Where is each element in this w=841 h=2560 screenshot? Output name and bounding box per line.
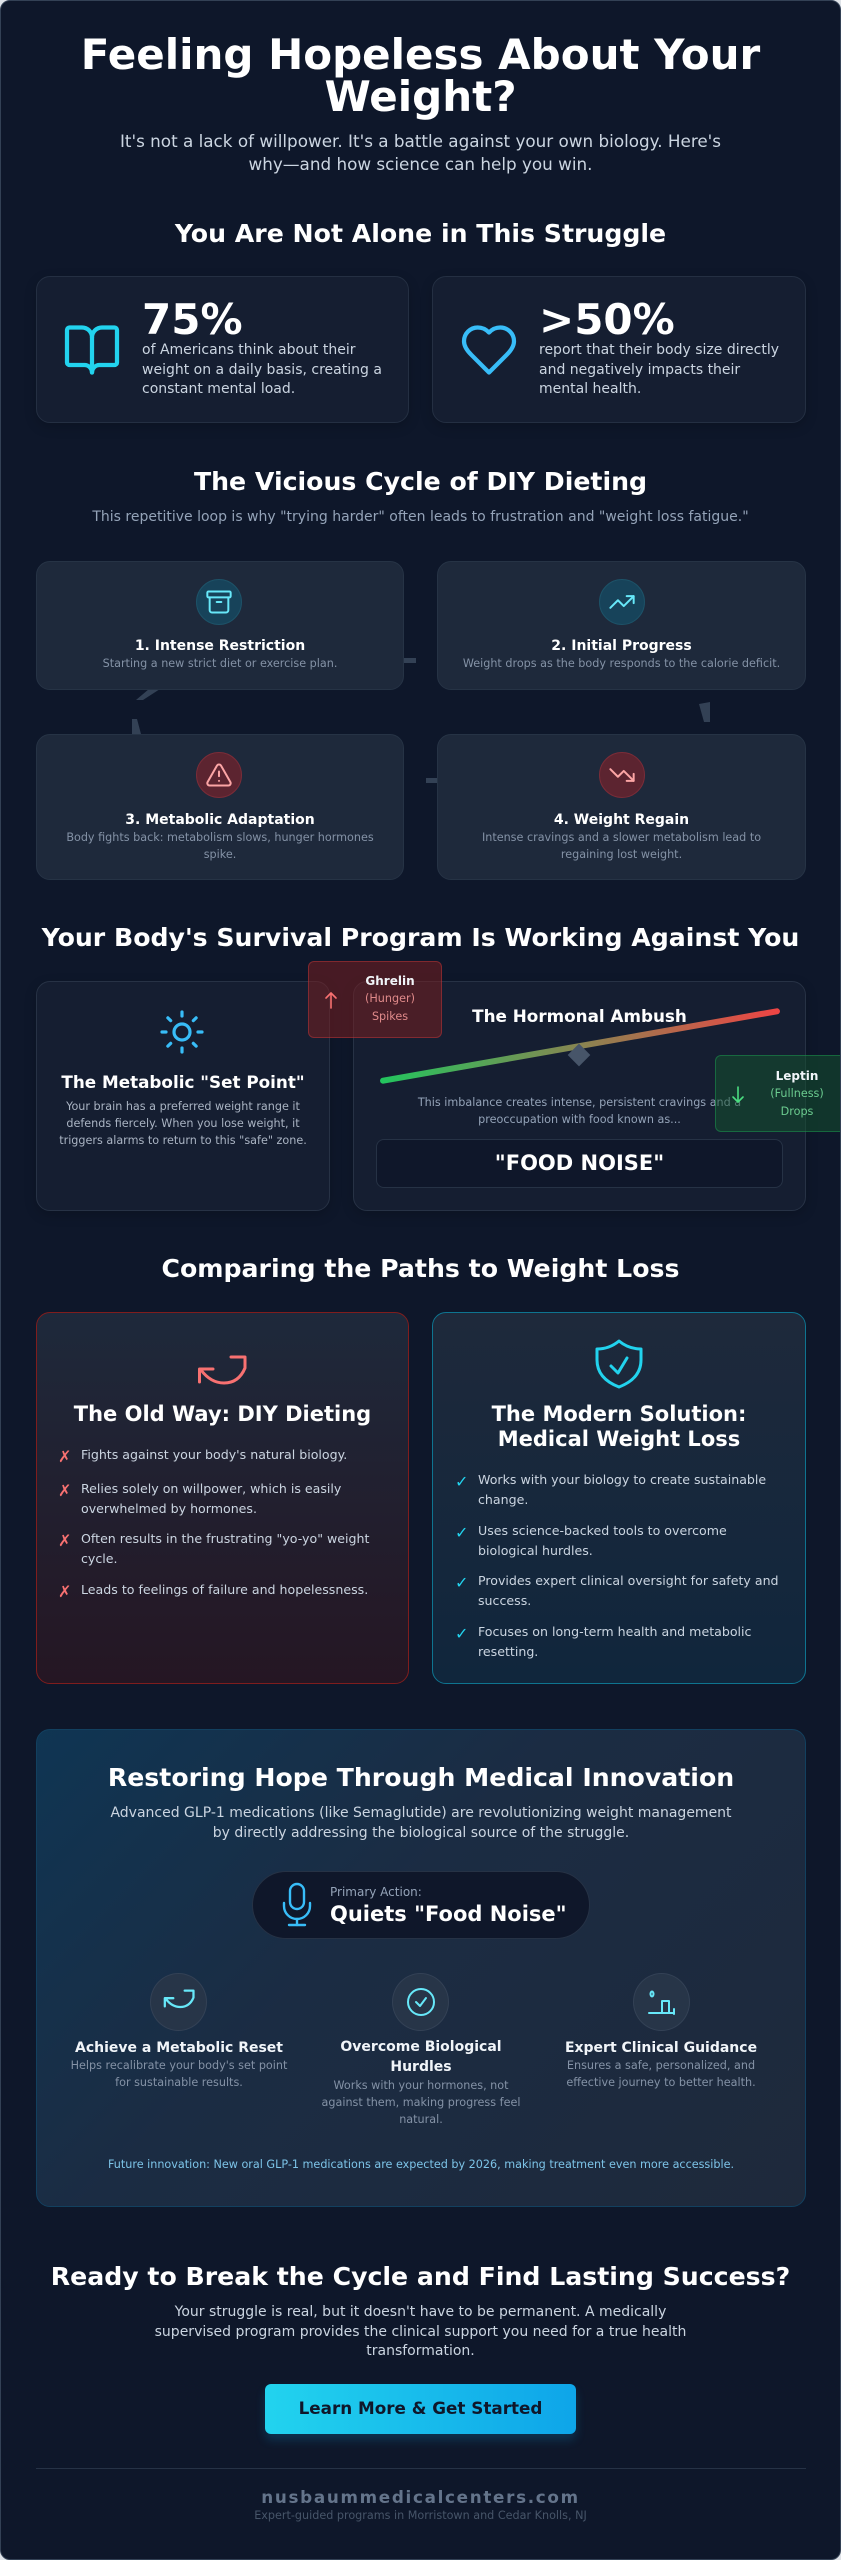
modern solution list xyxy=(455,1472,779,1659)
stat number: 75% xyxy=(142,295,243,344)
list item xyxy=(58,1481,341,1516)
leptin label: (Fullness) xyxy=(770,1087,824,1100)
step text xyxy=(482,831,761,861)
icon: return arrow xyxy=(198,1356,246,1384)
panel intro: Advanced GLP-1 medications (like Semaglutide) are revolutionizing weight management xyxy=(110,1805,732,1821)
step text: Weight drops as the body responds to the calorie deficit. xyxy=(463,657,780,670)
benefit text: effective journey to better health. xyxy=(566,2076,756,2089)
step text: Body fights back: metabolism slows, hunger hormones xyxy=(66,831,374,844)
list item: Fights against your body's natural biology. xyxy=(81,1447,347,1462)
panel: 75% stat xyxy=(36,276,409,423)
icon: open book xyxy=(64,325,120,375)
benefit title: Overcome Biological xyxy=(340,2039,502,2055)
callout: ghrelin xyxy=(308,961,442,1038)
set point title: The Metabolic "Set Point" xyxy=(61,1072,305,1092)
action label: Primary Action: xyxy=(330,1885,422,1899)
list item xyxy=(455,1573,779,1608)
stat text: report that their body size directly xyxy=(539,342,779,358)
stat text: weight on a daily basis, creating a xyxy=(142,362,382,378)
action text: Quiets "Food Noise" xyxy=(330,1902,567,1926)
footer domain: nusbaummedicalcenters.com xyxy=(261,2487,580,2507)
heading: not alone: You Are Not Alone in This Struggle xyxy=(175,219,666,248)
heading: call to action: Ready to Break the Cycle and Find Lasting Success? xyxy=(51,2262,790,2291)
old way list: ✗ xyxy=(58,1531,71,1550)
benefit title xyxy=(340,2039,502,2075)
callout: leptin xyxy=(715,1055,841,1132)
list item: Focuses on long-term health and metabolic xyxy=(478,1624,751,1639)
step title: 1. Intense Restriction xyxy=(135,638,305,654)
set point text: Your brain has a preferred weight range it xyxy=(66,1100,300,1113)
heading: vicious cycle: The Vicious Cycle of DIY Dieting xyxy=(194,467,647,496)
panel: 50% stat xyxy=(432,276,806,423)
ambush text: preoccupation with food known as... xyxy=(478,1113,681,1126)
icon: clinician xyxy=(633,1973,690,2031)
ambush text: This imbalance creates intense, persistent cravings and a xyxy=(418,1096,741,1109)
benefit: biological hurdles xyxy=(322,1973,520,2126)
icon: warning triangle xyxy=(196,752,242,798)
cta text: Your struggle is real, but it doesn't have to be permanent. A medically xyxy=(175,2304,666,2320)
list item: biological hurdles. xyxy=(478,1543,593,1558)
old way list: ✗ xyxy=(58,1447,71,1466)
stat text: mental health. xyxy=(539,381,641,397)
ambush title: The Hormonal Ambush xyxy=(472,1006,687,1026)
ambush text xyxy=(418,1096,741,1126)
food noise box xyxy=(376,1139,783,1188)
stat text: constant mental load. xyxy=(142,381,295,397)
modern solution list: ✓ xyxy=(455,1523,468,1542)
ghrelin label: Ghrelin xyxy=(365,974,415,988)
benefit text: natural. xyxy=(399,2113,443,2126)
footer divider xyxy=(36,2468,806,2469)
benefit text: Works with your hormones, not xyxy=(333,2079,509,2092)
section intro: This repetitive loop is why "trying harder" often leads to frustration and "weight loss fatigue." xyxy=(92,509,749,525)
benefit text: for sustainable results. xyxy=(115,2076,243,2089)
modern solution title: The Modern Solution: xyxy=(492,1402,746,1426)
modern solution list: ✓ xyxy=(455,1573,468,1592)
subtitle xyxy=(120,131,721,174)
stat text: and negatively impacts their xyxy=(539,362,740,378)
list item: Often results in the frustrating "yo-yo" weight xyxy=(81,1531,369,1546)
benefit text: Ensures a safe, personalized, and xyxy=(567,2059,755,2072)
step title: 4. Weight Regain xyxy=(554,812,689,828)
set point text: triggers alarms to return to this "safe" zone. xyxy=(59,1134,307,1147)
list item xyxy=(455,1523,727,1558)
panel: old way xyxy=(36,1312,409,1684)
panel intro xyxy=(110,1805,732,1841)
step text: regaining lost weight. xyxy=(561,848,682,861)
stat text xyxy=(539,342,779,397)
primary action pill xyxy=(252,1871,590,1939)
step text: spike. xyxy=(204,848,236,861)
icon: sun xyxy=(160,1010,204,1054)
button label: Learn More & Get Started xyxy=(299,2398,542,2418)
icon: microphone xyxy=(282,1882,312,1926)
panel: step 4 xyxy=(437,734,806,880)
title xyxy=(81,30,760,121)
list item: Leads to feelings of failure and hopelessness. xyxy=(81,1582,368,1597)
benefit title: Expert Clinical Guidance xyxy=(565,2040,757,2056)
stat text xyxy=(142,342,382,397)
icon: circle check xyxy=(392,1973,449,2031)
benefit text xyxy=(71,2059,288,2089)
footer locations: Expert-guided programs in Morristown and Cedar Knolls, NJ xyxy=(254,2509,587,2522)
stat number: >50% xyxy=(539,295,675,344)
panel: hormonal ambush xyxy=(353,981,806,1211)
heading: comparing paths: Comparing the Paths to Weight Loss xyxy=(161,1254,680,1283)
benefit text: against them, making progress feel xyxy=(322,2096,520,2109)
benefit: clinical guidance xyxy=(565,1973,757,2089)
list item xyxy=(455,1624,751,1659)
cta text: transformation. xyxy=(366,2343,475,2359)
future innovation note: Future innovation: New oral GLP-1 medications are expected by 2026, making treatment even more accessible. xyxy=(108,2158,734,2171)
title: Feeling Hopeless About Your xyxy=(81,30,760,79)
list item: Works with your biology to create sustainable xyxy=(478,1472,766,1487)
icon: trending down xyxy=(599,752,645,798)
icon: trending up xyxy=(599,579,645,625)
list item: Provides expert clinical oversight for safety and xyxy=(478,1573,779,1588)
list item: overwhelmed by hormones. xyxy=(81,1501,257,1516)
cta text: supervised program provides the clinical support you need for a true health xyxy=(155,2324,686,2340)
leptin label xyxy=(770,1069,824,1118)
stat text: of Americans think about their xyxy=(142,342,355,358)
step text xyxy=(66,831,374,861)
cta button xyxy=(265,2384,576,2434)
old way list xyxy=(58,1447,370,1601)
panel: modern solution xyxy=(432,1312,806,1684)
benefit text xyxy=(566,2059,756,2089)
old way list: ✗ xyxy=(58,1481,71,1500)
step text: Starting a new strict diet or exercise plan. xyxy=(103,657,337,670)
panel: step 2 xyxy=(437,561,806,690)
panel: set point xyxy=(36,981,330,1211)
title: Weight? xyxy=(324,72,517,121)
leptin label: Drops xyxy=(781,1105,813,1118)
seesaw pivot xyxy=(568,1044,590,1066)
modern solution list: ✓ xyxy=(455,1624,468,1643)
step title: 3. Metabolic Adaptation xyxy=(125,812,315,828)
list item: Relies solely on willpower, which is easily xyxy=(81,1481,341,1496)
food noise label: "FOOD NOISE" xyxy=(495,1151,664,1175)
panel: step 3 xyxy=(36,734,404,880)
list item xyxy=(58,1531,370,1566)
set point text: defends fiercely. When you lose weight, it xyxy=(66,1117,300,1130)
seesaw beam xyxy=(379,1008,780,1084)
panel title: Restoring Hope Through Medical Innovation xyxy=(108,1763,734,1792)
modern solution title xyxy=(492,1402,746,1451)
icon: archive box xyxy=(196,579,242,625)
set point text xyxy=(59,1100,307,1147)
cta text xyxy=(155,2304,686,2359)
icon: up arrow xyxy=(325,992,337,1009)
list item xyxy=(455,1472,766,1507)
old way list: ✗ xyxy=(58,1582,71,1601)
old way title: The Old Way: DIY Dieting xyxy=(74,1402,371,1426)
icon: down arrow xyxy=(732,1086,744,1103)
list item: change. xyxy=(478,1492,528,1507)
list item: cycle. xyxy=(81,1551,118,1566)
panel: step 1 xyxy=(36,561,404,690)
icon: reset arrow xyxy=(150,1973,207,2031)
list item: Uses science-backed tools to overcome xyxy=(478,1523,727,1538)
modern solution title: Medical Weight Loss xyxy=(498,1427,740,1451)
leptin label: Leptin xyxy=(776,1069,818,1083)
benefit title: Achieve a Metabolic Reset xyxy=(75,2040,283,2056)
heading: survival program: Your Body's Survival Program Is Working Against You xyxy=(42,923,799,952)
subtitle: why—and how science can help you win. xyxy=(248,154,593,174)
ghrelin label: (Hunger) xyxy=(365,992,415,1005)
panel: restoring hope xyxy=(36,1729,806,2207)
modern solution list: ✓ xyxy=(455,1472,468,1491)
list item: resetting. xyxy=(478,1644,538,1659)
panel intro: by directly addressing the biological source of the struggle. xyxy=(213,1825,629,1841)
step text: Intense cravings and a slower metabolism lead to xyxy=(482,831,761,844)
benefit: metabolic reset xyxy=(71,1973,288,2089)
icon: shield check xyxy=(596,1340,642,1388)
benefit title: Hurdles xyxy=(390,2059,452,2075)
icon: heart xyxy=(462,325,516,375)
ghrelin label xyxy=(365,974,415,1023)
benefit text xyxy=(322,2079,520,2126)
subtitle: It's not a lack of willpower. It's a battle against your own biology. Here's xyxy=(120,131,721,151)
ghrelin label: Spikes xyxy=(372,1010,408,1023)
list item: success. xyxy=(478,1593,531,1608)
benefit text: Helps recalibrate your body's set point xyxy=(71,2059,287,2072)
step title: 2. Initial Progress xyxy=(551,638,692,654)
